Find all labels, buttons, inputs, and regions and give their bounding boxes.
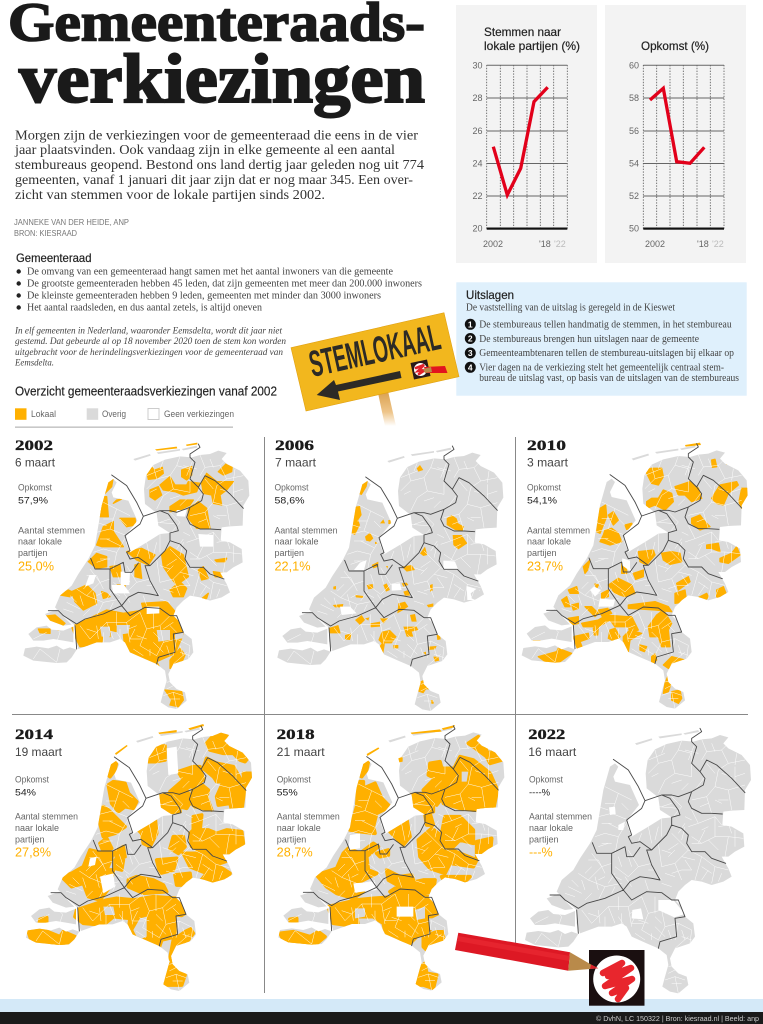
line: opkomst — [650, 88, 704, 163]
legend: Lokaal — [31, 409, 56, 419]
intro text: zicht van stemmen voor de lokale partijen sinds 2002. — [15, 188, 325, 203]
stats 2006: 58,6% — [274, 495, 305, 506]
stats 2002: 25,0% — [18, 559, 54, 573]
stats 2022: Opkomst — [529, 775, 563, 785]
stats 2002 — [18, 483, 85, 573]
credits: JANNEKE VAN DER HEIDE, ANP — [14, 218, 129, 227]
icon: red pencil and ballot mark — [455, 933, 644, 1006]
heading 2014: 19 maart — [15, 745, 63, 759]
heading 2014: 2014 — [15, 727, 54, 743]
heading 2022: 2022 — [528, 727, 565, 743]
stats 2010 — [527, 483, 590, 573]
text block: gemeenteraad: De grootste gemeenteraden hebben 45 leden, dat zijn gemeenten met meer dan 200.000 inwoners — [27, 278, 422, 290]
stats 2014: naar lokale — [15, 823, 59, 833]
panel: map 2010 — [522, 438, 750, 709]
x axis labels: 2002 — [645, 239, 665, 249]
stats 2002: Opkomst — [18, 483, 52, 493]
chart title — [484, 25, 580, 53]
title — [8, 0, 425, 118]
stats 2006: partijen — [274, 548, 304, 558]
step 2: De stembureaus brengen hun uitslagen naar de gemeente — [479, 334, 700, 345]
heading 2006: 7 maart — [275, 456, 317, 470]
map 2014 — [26, 724, 252, 991]
stats 2010: Opkomst — [527, 483, 561, 493]
stats 2014: partijen — [15, 834, 45, 844]
pencil — [455, 933, 598, 971]
text block: eemsdelta note: Eemsdelta. — [14, 358, 54, 368]
stats 2010: 23,7% — [527, 559, 563, 573]
heading 2014 — [15, 727, 63, 759]
stats 2022: naar lokale — [529, 823, 573, 833]
text block: gemeenteraad: Het aantal raadsleden, en dus aantal zetels, is altijd oneven — [27, 302, 262, 314]
panel: map 2006 — [274, 438, 503, 711]
panel: map 2002 — [15, 438, 249, 709]
stats 2002: naar lokale — [18, 537, 62, 547]
stats 2018: 55% — [277, 787, 298, 798]
intro text: gemeenten, vanaf 1 januari dit jaar zijn dat er nog maar 345. Een over- — [15, 173, 413, 188]
x axis labels: '22 — [712, 239, 724, 249]
y axis labels: 54 — [629, 158, 639, 168]
step 4: Vier dagen na de verkiezing stelt het gemeentelijk centraal stem- — [479, 362, 724, 374]
stats 2018: naar lokale — [277, 823, 321, 833]
stats 2010: partijen — [527, 548, 557, 558]
heading 2022: 16 maart — [528, 745, 577, 759]
sign board — [291, 313, 459, 411]
dividing rules — [12, 437, 748, 993]
x axis labels: 2002 — [483, 239, 503, 249]
heading 2018: 2018 — [277, 727, 315, 743]
sign lettering: STEMLOKAAL — [305, 316, 444, 385]
heading 2010: 2010 — [527, 438, 566, 454]
stats 2018: 28,7% — [277, 846, 313, 860]
stats 2018: Aantal stemmen — [277, 811, 340, 821]
panel: chart stemmen naar lokale partijen — [456, 5, 597, 263]
stats 2002: Aantal stemmen — [18, 525, 85, 535]
intro text: stembureaus geopend. Bestond ons land dertig jaar geleden nog uit 774 — [15, 158, 424, 173]
heading: overzicht: Overzicht gemeenteraadsverkiezingen vanaf 2002 — [15, 385, 277, 399]
y axis labels — [472, 60, 483, 234]
y axis labels: 22 — [472, 191, 483, 201]
stats 2014 — [15, 775, 78, 860]
text block: eemsdelta note: gestemd. Dat gebeurde al op 18 november 2020 toen de stem kon worden — [15, 337, 286, 347]
stats 2006: Opkomst — [274, 483, 309, 493]
stats 2022: ---% — [529, 846, 553, 860]
x axis labels — [645, 239, 724, 249]
step 4: 4 — [468, 362, 473, 372]
intro text: Morgen zijn de verkiezingen voor de gemeenteraad die eens in de vier — [15, 128, 418, 144]
step 2: 2 — [468, 334, 473, 344]
stats 2010: naar lokale — [527, 537, 571, 547]
chart title: Stemmen naar — [484, 25, 561, 39]
step 4: bureau de uitslag vast, op basis van de uitslagen van de stembureaus — [479, 373, 739, 384]
legend: Overig — [102, 409, 126, 419]
step 4 — [465, 362, 739, 384]
y axis labels: 56 — [629, 126, 639, 136]
stats 2022: Aantal stemmen — [529, 811, 592, 821]
x axis labels: '22 — [554, 239, 566, 249]
stats 2006: naar lokale — [274, 537, 319, 547]
y axis labels: 60 — [629, 60, 639, 70]
x axis labels: '18 — [697, 239, 709, 249]
stats 2014: 27,8% — [15, 846, 51, 860]
heading 2002: 2002 — [15, 438, 53, 454]
stats 2018: partijen — [277, 834, 306, 844]
text block: eemsdelta note: uitgebracht voor de herindelingsverkiezingen voor de gemeenteraad van — [15, 348, 283, 358]
sign logo — [410, 360, 448, 380]
step 3: Gemeenteambtenaren tellen de stembureau-uitslagen bij elkaar op — [479, 348, 734, 359]
heading 2010 — [527, 438, 569, 470]
y axis labels: 30 — [472, 60, 483, 70]
panel: map 2014 — [15, 724, 252, 991]
panel: map 2022 — [525, 727, 751, 993]
text block: eemsdelta note: In elf gemeenten in Nederland, waaronder Eemsdelta, wordt dit jaar niet — [14, 325, 282, 336]
y axis labels: 52 — [629, 191, 639, 201]
y axis labels: 26 — [472, 126, 483, 136]
y axis labels — [629, 60, 639, 234]
y axis labels: 24 — [472, 158, 483, 168]
stats 2014: 54% — [15, 787, 37, 798]
sign post — [378, 391, 396, 426]
illustration: stemlokaal sign — [291, 313, 459, 426]
map 2002 — [23, 443, 249, 709]
panel: chart opkomst — [605, 5, 746, 263]
stats 2018: Opkomst — [277, 775, 311, 785]
stats 2014: Aantal stemmen — [15, 811, 78, 821]
y axis labels: 20 — [472, 224, 483, 234]
heading 2006: 2006 — [275, 438, 315, 454]
footer band — [0, 999, 763, 1024]
text block: gemeenteraad: De omvang van een gemeenteraad hangt samen met het aantal inwoners van die gemeente — [27, 266, 394, 277]
chart title: lokale partijen (%) — [484, 39, 580, 53]
y axis labels: 58 — [629, 93, 639, 103]
x axis labels — [483, 239, 566, 249]
map 2010 — [522, 443, 750, 709]
intro text: jaar plaatsvinden. Ook vandaag zijn in elke gemeente al een aantal — [14, 143, 395, 158]
legend — [15, 408, 234, 428]
stats 2010: 54,1% — [527, 495, 558, 506]
heading 2018: 21 maart — [277, 745, 325, 759]
map 2006 — [277, 446, 503, 711]
legend: Geen verkiezingen — [164, 409, 234, 419]
y axis labels: 28 — [472, 93, 483, 103]
stats 2010: Aantal stemmen — [527, 525, 590, 535]
panel: uitslagen — [456, 282, 747, 396]
text block: gemeenteraad — [16, 251, 422, 314]
stats 2022 — [529, 775, 592, 860]
line: stemmen — [493, 87, 548, 195]
heading 2002: 6 maart — [15, 456, 56, 470]
panel: uitslagen: De vaststelling van de uitslag is geregeld in de Kieswet — [466, 303, 675, 314]
text block: eemsdelta note — [14, 325, 286, 368]
panel: map 2018 — [277, 725, 504, 991]
y axis labels: 50 — [629, 224, 639, 234]
map 2022 — [525, 728, 751, 993]
stats 2006: Aantal stemmen — [274, 525, 338, 535]
stats 2002: partijen — [18, 548, 48, 558]
stats 2022: partijen — [529, 834, 559, 844]
stats 2006 — [274, 483, 338, 573]
credits: BRON: KIESRAAD — [14, 229, 77, 238]
text block: gemeenteraad: De kleinste gemeenteraden hebben 9 leden, gemeenten met minder dan 3000 inwoners — [27, 290, 381, 302]
step 1: De stembureaus tellen handmatig de stemmen, in het stembureau — [479, 320, 732, 331]
heading 2002 — [15, 438, 56, 470]
stats 2022: ----% — [529, 787, 551, 798]
stats 2018 — [277, 775, 340, 860]
intro text — [14, 128, 424, 203]
map 2018 — [278, 725, 504, 991]
sign arrow — [317, 371, 402, 400]
title: verkiezingen — [19, 41, 425, 118]
heading 2006 — [275, 438, 317, 470]
chart title: Opkomst (%) — [641, 39, 709, 53]
stats 2002: 57,9% — [18, 495, 49, 506]
stats 2006: 22,1% — [274, 559, 310, 573]
stats 2014: Opkomst — [15, 775, 49, 785]
x axis labels: '18 — [539, 239, 551, 249]
heading 2022 — [528, 727, 577, 759]
ballot mark — [589, 950, 644, 1006]
credits — [14, 218, 129, 238]
step 1: 1 — [468, 319, 473, 329]
footer credit: © DvhN, LC 150322 | Bron: kiesraad.nl | Beeld: anp — [596, 1014, 759, 1023]
text block: gemeenteraad: Gemeenteraad — [16, 251, 92, 265]
heading 2018 — [277, 727, 325, 759]
step 3: 3 — [468, 348, 473, 358]
heading 2010: 3 maart — [527, 456, 569, 470]
panel: uitslagen: Uitslagen — [466, 288, 514, 302]
